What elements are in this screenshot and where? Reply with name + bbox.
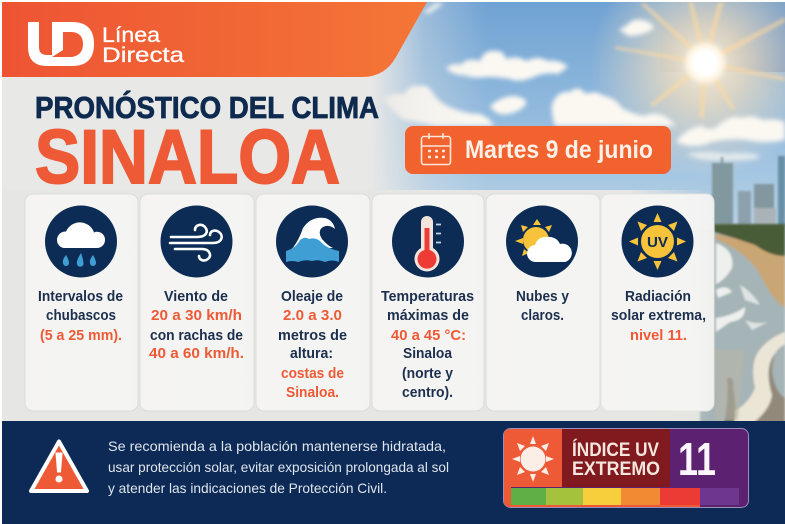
panel: chubascos: (5 a 25 mm). xyxy=(40,327,122,344)
panel: radiación: solar extrema, xyxy=(611,307,706,324)
panel: oleaje: altura: xyxy=(290,345,333,362)
title: PRONÓSTICO DEL CLIMA xyxy=(35,89,379,125)
panel: viento: con rachas de xyxy=(150,327,243,344)
panel: temperaturas: centro). xyxy=(402,384,453,401)
panel: radiación: Radiación xyxy=(625,288,691,305)
panel: nubes: Nubes y xyxy=(516,288,570,305)
panel: temperaturas: Temperaturas xyxy=(381,288,474,305)
panel: viento xyxy=(140,194,254,411)
date pill: Martes 9 de junio xyxy=(465,136,653,164)
panel: temperaturas: máximas de xyxy=(387,307,469,324)
icon: sun xyxy=(512,436,554,482)
icon: calendar xyxy=(422,133,450,164)
panel: temperaturas: 40 a 45 °C: xyxy=(391,327,466,344)
icon: warning triangle xyxy=(31,442,87,491)
panel: oleaje: 2.0 a 3.0 xyxy=(283,307,342,324)
panel: viento: 20 a 30 km/h xyxy=(151,307,242,324)
panel: radiación: nivel 11. xyxy=(630,327,687,344)
city skyline xyxy=(712,156,785,226)
logo: Línea Directa xyxy=(28,22,184,67)
icon: UV sun: UV xyxy=(647,234,668,251)
panel: chubascos: chubascos xyxy=(46,307,116,324)
UV index badge xyxy=(504,428,748,508)
icon: thermometer xyxy=(392,206,464,278)
panel: radiación xyxy=(601,194,714,411)
panel: nubes: claros. xyxy=(521,307,564,324)
bottom band xyxy=(2,421,785,524)
logo: Línea Directa: Línea xyxy=(102,24,160,47)
icon: wave xyxy=(276,206,348,278)
icon: rain cloud xyxy=(45,206,117,278)
icon: wind xyxy=(160,206,232,278)
panel: temperaturas xyxy=(372,194,484,411)
sun xyxy=(598,2,785,168)
clouds xyxy=(384,3,785,161)
panel: nubes xyxy=(486,194,600,411)
panel: oleaje: costas de xyxy=(281,365,344,382)
panel: temperaturas: Sinaloa xyxy=(403,345,453,362)
recommendation text: Se recomienda a la población mantenerse hidratada, xyxy=(108,438,446,454)
icon: UV sun xyxy=(622,206,694,278)
date pill xyxy=(405,126,671,174)
UV index badge: EXTREMO xyxy=(572,459,660,480)
state name: SINALOA xyxy=(35,115,340,200)
UV scale bar xyxy=(511,488,739,505)
recommendation text: usar protección solar, evitar exposición prolongada al sol xyxy=(108,459,449,475)
panel: viento: Viento de xyxy=(164,288,228,305)
recommendation text xyxy=(108,438,449,496)
logo: Línea Directa: Directa xyxy=(102,44,184,67)
coast: sea, sand, palms xyxy=(700,224,785,424)
panel: chubascos xyxy=(25,194,138,411)
panel: oleaje: Sinaloa. xyxy=(286,384,339,401)
panel: temperaturas: (norte y xyxy=(402,365,454,382)
panel: viento: 40 a 60 km/h. xyxy=(149,345,244,362)
UV index badge: ÍNDICE UV xyxy=(572,439,659,461)
left pale overlay xyxy=(2,2,475,190)
panel: oleaje: metros de xyxy=(278,327,347,344)
header banner xyxy=(2,2,427,77)
icon: sun and cloud xyxy=(506,206,578,278)
UV index badge: 11 xyxy=(678,433,716,485)
recommendation text: y atender las indicaciones de Protección Civil. xyxy=(108,480,387,496)
panel: chubascos: Intervalos de xyxy=(38,288,123,305)
panel: oleaje xyxy=(256,194,370,411)
panel: oleaje: Oleaje de xyxy=(281,288,343,305)
